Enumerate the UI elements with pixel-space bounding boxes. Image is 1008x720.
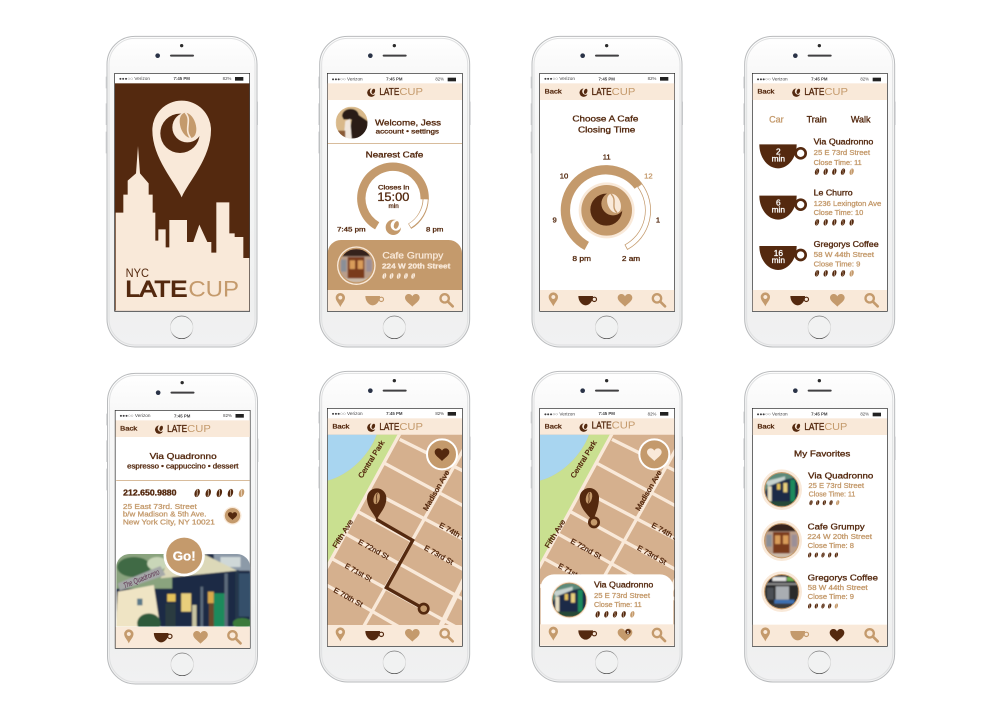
- cafe 3: Gregorys Coffee: 16: [774, 248, 783, 258]
- address: 25 East 73rd. Street: [123, 502, 198, 511]
- countdown text: [377, 185, 410, 210]
- status bar: ●●●○○ Verizon: [544, 76, 576, 81]
- map labels: E 74th St: [438, 521, 470, 544]
- time labels: [337, 226, 444, 233]
- avatar: [336, 107, 368, 139]
- status bar: [119, 413, 244, 419]
- nav bar: [540, 624, 674, 646]
- phone 8: favorites: [743, 371, 896, 682]
- nav bar: [115, 627, 250, 648]
- phone 6: route map: [318, 371, 471, 682]
- phone number: 212.650.9880: [123, 489, 177, 498]
- cafe card: Close Time: 11: [594, 602, 642, 609]
- status bar: [544, 411, 668, 417]
- heading: [572, 114, 639, 135]
- favorite 3: Gregorys Coffee: Gregorys Coffee: [808, 573, 878, 583]
- map: [538, 433, 678, 628]
- map labels: E 71st St: [343, 561, 373, 583]
- nav bar: 1: [627, 629, 630, 634]
- welcome text: Welcome, Jess: [375, 118, 442, 128]
- status bar: 82%: [223, 413, 232, 418]
- heading: Choose A Cafe: [572, 114, 639, 124]
- status bar: [757, 412, 881, 417]
- map labels: E 72nd St: [357, 537, 391, 561]
- map labels: Fifth Ave: [543, 518, 567, 550]
- cafe 2: Le Churro: Le Churro: [814, 189, 853, 198]
- header: [115, 420, 250, 437]
- map labels: Fifth Ave: [330, 518, 355, 550]
- dial labels: 1: [656, 216, 660, 225]
- favorite 2: Cafe Grumpy: Close Time: 8: [808, 543, 854, 550]
- dial labels: 2 am: [622, 254, 640, 263]
- countdown dial: [361, 167, 426, 235]
- header: LATE: [379, 422, 400, 433]
- cafe 1: Via Quadronno: 2: [776, 146, 781, 156]
- dial labels: 9: [553, 216, 557, 225]
- phone 5: cafe detail: [106, 373, 258, 684]
- travel mode tabs: Car: [769, 115, 784, 125]
- favorite 1: Via Quadronno: Close Time: 11: [809, 491, 855, 498]
- status bar: [757, 77, 881, 82]
- go button: Go!: [173, 549, 196, 564]
- cafe card: Via Quadronno: [594, 580, 654, 590]
- splash background: [115, 83, 249, 311]
- header: Back: [120, 426, 138, 433]
- dial labels: 8 pm: [572, 254, 591, 263]
- status bar: 7:45 PM: [811, 412, 828, 417]
- header: CUP: [612, 87, 636, 98]
- phone 3: closing time dial: [531, 36, 683, 347]
- heading: My Favorites: [794, 449, 851, 459]
- status bar: ●●●○○ Verizon: [332, 411, 363, 416]
- title LATE: LATE: [125, 277, 187, 302]
- favorite 2: Cafe Grumpy: [761, 520, 872, 561]
- status bar: ●●●○○ Verizon: [757, 412, 788, 417]
- go button: [163, 535, 205, 576]
- travel mode tabs: Walk: [851, 115, 871, 125]
- cafe 3: Gregorys Coffee: Close Time: 9: [814, 261, 860, 268]
- status bar: ●●●○○ Verizon: [757, 77, 788, 82]
- status bar: [544, 76, 668, 82]
- map labels: Madison Ave: [421, 469, 451, 512]
- phone frame: [531, 36, 683, 347]
- header: LATE: [379, 87, 400, 98]
- skyline: [116, 146, 249, 311]
- map labels: E 72nd St: [569, 537, 603, 561]
- map labels: E 70th St: [332, 586, 364, 609]
- phone frame: [743, 371, 896, 682]
- dial labels: [553, 153, 660, 263]
- cafe card: [541, 574, 673, 625]
- header: [540, 418, 674, 435]
- map labels: [330, 438, 470, 609]
- dial labels: 11: [603, 153, 611, 162]
- status bar: 7:45 PM: [174, 414, 191, 419]
- storefront photo: The Quadronno: [122, 567, 161, 590]
- time dial: [565, 170, 648, 247]
- favorite button: [427, 439, 457, 469]
- title CUP: CUP: [188, 277, 239, 302]
- favorite 1: Via Quadronno: Via Quadronno: [808, 471, 874, 481]
- destination pin: [367, 488, 386, 520]
- address: b/w Madison & 5th Ave.: [123, 510, 206, 519]
- status bar: 82%: [648, 412, 656, 417]
- countdown text: 15:00: [377, 190, 409, 204]
- favorite button: [223, 507, 241, 525]
- status bar: 7:45 PM: [386, 77, 403, 82]
- nearest cafe card: 224 W 20th Street: [382, 262, 451, 271]
- nearest cafe card: Cafe Grumpy: [382, 251, 444, 261]
- header: LATE: [804, 422, 825, 433]
- status bar: 7:45 PM: [598, 77, 615, 82]
- header: CUP: [612, 421, 636, 432]
- favorite 3: Gregorys Coffee: 58 W 44th Street: [808, 585, 868, 592]
- map labels: E 74th St: [650, 521, 682, 544]
- phone 7: map with cafe card: [531, 371, 683, 682]
- cafe 2: Le Churro: min: [772, 205, 785, 215]
- time labels: 8 pm: [426, 226, 444, 233]
- status bar: 82%: [648, 76, 656, 81]
- status bar: 7:45 PM: [598, 411, 615, 416]
- countdown text: Closes in: [378, 185, 410, 192]
- map labels: [543, 438, 682, 583]
- cafe 3: Gregorys Coffee: [759, 240, 879, 277]
- travel mode tabs: Train: [807, 115, 827, 125]
- status bar: 7:45 PM: [173, 76, 190, 81]
- status bar: 82%: [435, 77, 444, 82]
- header: Back: [757, 89, 775, 96]
- phone frame: [106, 373, 258, 684]
- location pin logo: [152, 101, 211, 197]
- nav bar: [753, 625, 887, 646]
- address: [123, 502, 215, 527]
- status bar: [332, 411, 456, 416]
- header: LATE: [804, 87, 825, 98]
- status bar: 82%: [860, 77, 869, 82]
- map labels: Madison Ave: [633, 469, 664, 512]
- route line: [376, 519, 428, 613]
- cafe 1: Via Quadronno: [759, 138, 874, 175]
- map: [326, 433, 466, 628]
- favorite 3: Gregorys Coffee: [761, 571, 878, 612]
- countdown text: min: [389, 203, 399, 210]
- header: CUP: [824, 422, 848, 433]
- phone 1: splash screen: [106, 36, 258, 347]
- phone frame: [318, 371, 471, 682]
- status bar: 82%: [435, 411, 444, 416]
- favorite 2: Cafe Grumpy: Cafe Grumpy: [808, 522, 865, 532]
- cafe 3: Gregorys Coffee: 58 W 44th Street: [814, 252, 874, 259]
- nav bar: [328, 625, 462, 646]
- header: LATE: [167, 424, 187, 435]
- status bar: [119, 76, 243, 81]
- nav bar: [328, 290, 462, 311]
- header: [753, 83, 887, 100]
- header: CUP: [399, 87, 423, 98]
- dial labels: 12: [644, 172, 653, 181]
- nearest cafe card: [328, 240, 462, 290]
- title NYC: NYC: [126, 266, 149, 280]
- cafe 3: Gregorys Coffee: Gregorys Coffee: [814, 240, 879, 249]
- header: LATE: [592, 87, 612, 98]
- time labels: 7:45 pm: [337, 226, 366, 233]
- header: CUP: [399, 422, 423, 433]
- status bar: 7:45 PM: [811, 77, 828, 82]
- header: Back: [332, 424, 350, 431]
- favorite 3: Gregorys Coffee: Close Time: 9: [808, 594, 854, 601]
- map labels: Central Park: [568, 438, 599, 480]
- cafe card: 25 E 73rd Street: [594, 593, 650, 600]
- address: New York City, NY 10021: [123, 518, 215, 527]
- phone 4: cafe list by travel time: [743, 36, 896, 347]
- nav bar: [753, 290, 887, 311]
- map labels: E 71st St: [557, 561, 587, 583]
- status bar: ●●●○○ Verizon: [332, 77, 363, 82]
- header: LATE: [592, 421, 612, 432]
- header: CUP: [824, 87, 848, 98]
- phone frame: [106, 36, 258, 347]
- cafe pin with location dot: [580, 488, 599, 527]
- favorite 1: Via Quadronno: [761, 469, 874, 510]
- nav bar: [540, 290, 674, 311]
- header: [753, 418, 887, 435]
- favorite 2: Cafe Grumpy: 224 W 20th Street: [807, 534, 872, 541]
- status bar: ●●●○○ Verizon: [119, 76, 151, 81]
- cafe 1: Via Quadronno: Via Quadronno: [814, 138, 874, 147]
- map labels: E 73rd St: [636, 543, 668, 567]
- header: Back: [545, 424, 562, 431]
- rating beans: [193, 488, 245, 498]
- status bar: ●●●○○ Verizon: [119, 413, 151, 418]
- phone frame: [318, 36, 471, 347]
- favorite 1: Via Quadronno: 25 E 73rd Street: [808, 483, 864, 490]
- status bar: 7:45 PM: [386, 411, 403, 416]
- header: [328, 418, 462, 435]
- heading: Closing Time: [578, 125, 636, 135]
- travel mode tabs: [769, 115, 871, 125]
- account links: account • settings: [376, 129, 440, 136]
- cafe 1: Via Quadronno: 25 E 73rd Street: [814, 150, 870, 157]
- status bar: 82%: [860, 412, 869, 417]
- phone frame: [531, 371, 683, 682]
- cafe 1: Via Quadronno: min: [772, 153, 785, 163]
- cafe 2: Le Churro: [759, 189, 881, 226]
- cafe 2: Le Churro: 1236 Lexington Ave: [814, 201, 881, 208]
- phone 2: nearest cafe: [318, 36, 471, 347]
- cafe 2: Le Churro: 6: [776, 198, 781, 208]
- header: CUP: [187, 424, 211, 435]
- cafe 3: Gregorys Coffee: min: [772, 255, 785, 265]
- cafe 1: Via Quadronno: Close Time: 11: [814, 160, 862, 167]
- cafe name: Via Quadronno: [150, 451, 217, 461]
- status bar: ●●●○○ Verizon: [544, 412, 576, 417]
- map labels: Central Park: [356, 438, 386, 480]
- storefront photo: [116, 554, 250, 627]
- phone frame: [743, 36, 896, 347]
- header: Back: [545, 89, 562, 96]
- map labels: E 73rd St: [423, 543, 455, 567]
- status bar: [332, 77, 456, 82]
- favorite button: [639, 439, 669, 469]
- header: [328, 83, 462, 100]
- dial labels: 10: [560, 172, 568, 181]
- cafe 2: Le Churro: Close Time: 10: [814, 210, 863, 217]
- header: Back: [757, 424, 775, 431]
- header: [540, 83, 674, 100]
- nearest cafe heading: Nearest Cafe: [366, 150, 424, 160]
- status bar: 82%: [223, 76, 231, 81]
- cafe offerings: espresso • cappuccino • dessert: [127, 464, 239, 471]
